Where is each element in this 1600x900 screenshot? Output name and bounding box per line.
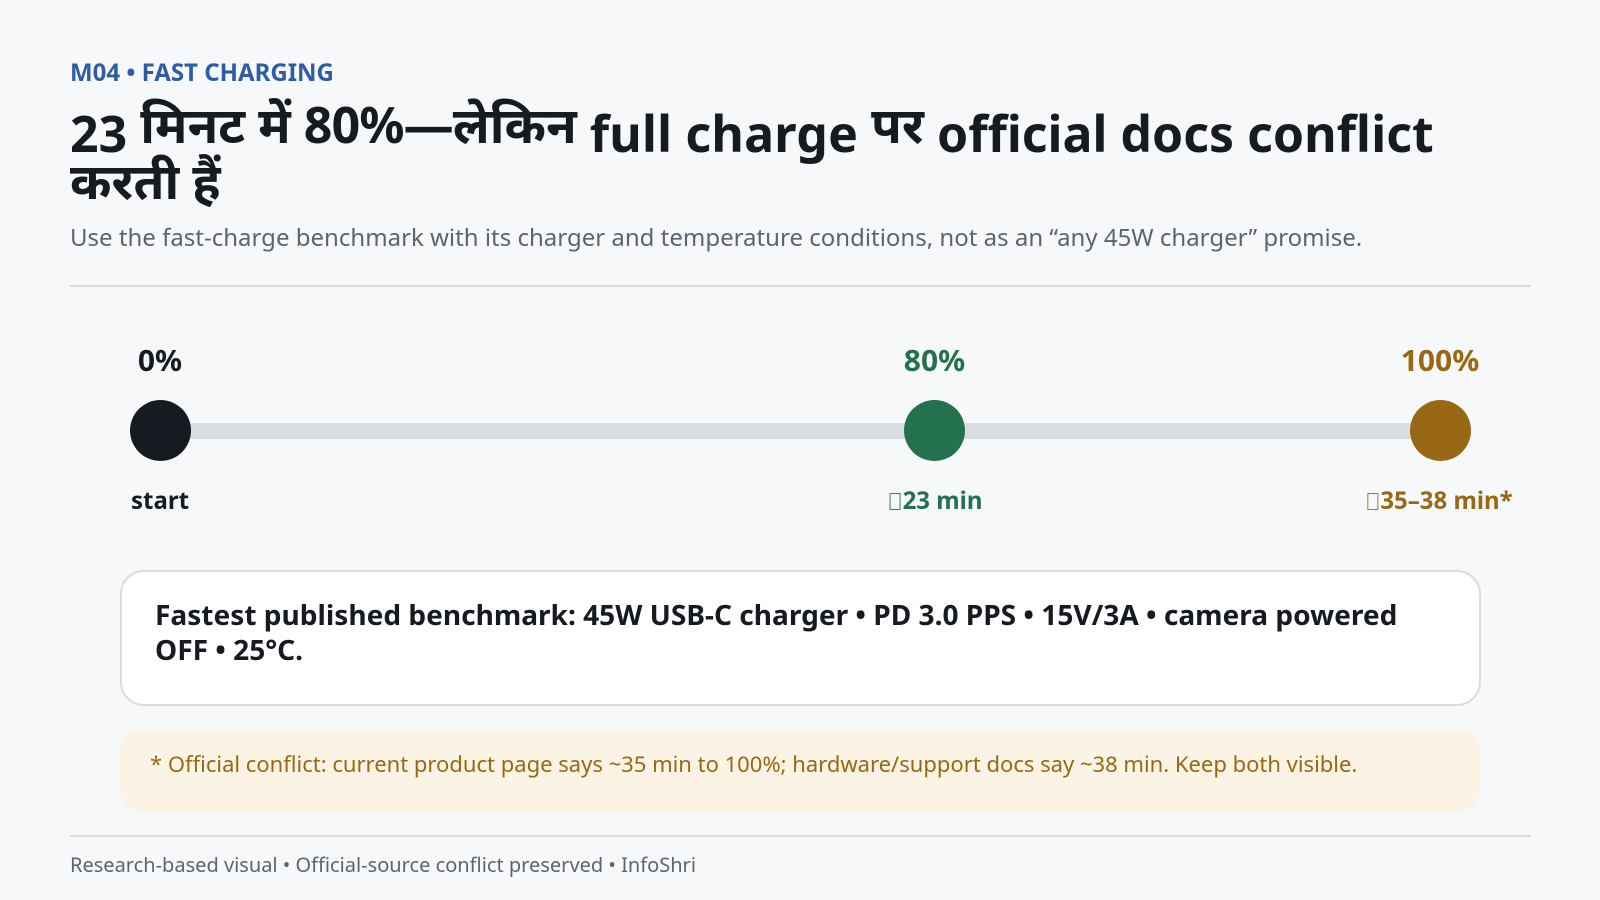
milestone: 23 min label: 23 min xyxy=(903,484,982,517)
milestone: start label: start xyxy=(131,484,189,517)
timeline xyxy=(130,339,1513,517)
footer divider xyxy=(70,835,1531,837)
conflict note text: * Official conflict: current product page says ~35 min to 100%; hardware/support docs say ~38 min. Keep both visible. xyxy=(150,749,1357,779)
title: 23 मिनट में 80%—लेकिन full charge पर official docs conflict करती हैं xyxy=(70,90,1434,214)
conflict note box xyxy=(120,730,1480,811)
footer source line: Research-based visual • Official-source conflict preserved • InfoShri xyxy=(70,851,696,878)
benchmark conditions card xyxy=(120,570,1481,706)
milestone: 80% label: 80% xyxy=(904,339,965,380)
milestone: 0% label: 0% xyxy=(138,339,182,380)
subtitle: Use the fast-charge benchmark with its charger and temperature conditions, not as an “any 45W charger” promise. xyxy=(70,221,1362,254)
milestone: 35-38 min label: 35–38 min* xyxy=(1380,484,1513,517)
milestone: 0% dot xyxy=(130,400,191,461)
timeline track xyxy=(160,423,1440,439)
milestone: 100% label: 100% xyxy=(1401,339,1479,380)
milestone: 100% dot xyxy=(1410,400,1471,461)
milestone: 80% dot xyxy=(904,400,965,461)
benchmark conditions text: Fastest published benchmark: 45W USB-C charger • PD 3.0 PPS • 15V/3A • camera powered OFF • 25°C. xyxy=(155,596,1397,669)
header divider xyxy=(70,285,1531,287)
eyebrow label: M04 • FAST CHARGING xyxy=(70,56,334,89)
